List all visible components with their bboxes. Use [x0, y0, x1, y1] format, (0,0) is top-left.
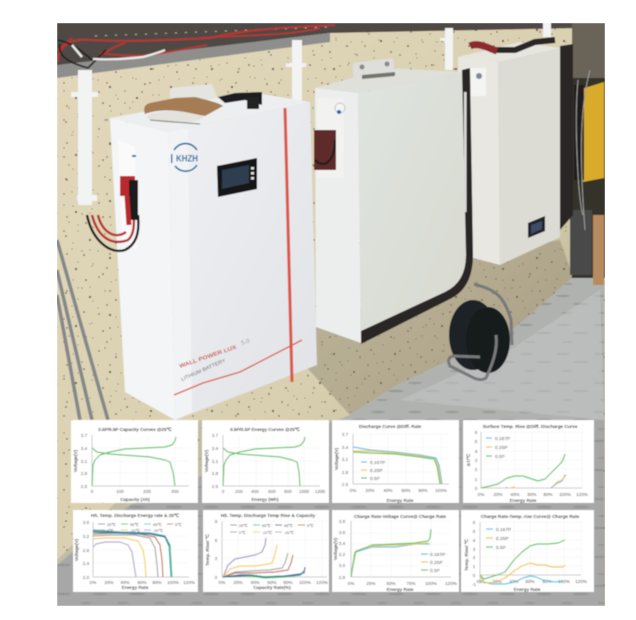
items on top of battery	[144, 92, 262, 124]
chart: charge rate voltage: Energy Rate	[387, 587, 414, 592]
chart: surface temperature rise: 100%	[559, 492, 571, 497]
chart: energy curves: 200	[235, 489, 243, 494]
chart: energy curves: Voltage(V)	[204, 449, 209, 472]
chart: surface temperature rise: 40%	[510, 492, 520, 497]
chart: temperature discharge energy: H/L Temp. Discharge Energy rate & 25℃	[91, 512, 180, 518]
legend: 0.167P	[370, 460, 385, 466]
chart: energy curves: 0.5P/0.5P Energy Curves @25℃	[230, 426, 301, 432]
chart: charge rate temperature rise: 0%	[477, 579, 483, 584]
chart: temperature discharge energy: 2.0	[83, 575, 90, 580]
chart: temperature rise and capacity	[203, 510, 329, 592]
chart: temperature rise and capacity: 6	[215, 538, 218, 543]
display panel	[217, 158, 257, 197]
legend: 45℃	[284, 524, 293, 528]
chart: discharge curve: 40%	[383, 488, 393, 493]
chart: temperature rise and capacity: 100%	[299, 580, 311, 585]
chart: energy curves: 0	[222, 489, 225, 494]
chart: charge rate temperature rise: 80%	[542, 579, 552, 584]
chart: temperature rise and capacity: Capacity Rate(%)	[253, 585, 291, 590]
chart: surface temperature rise: 60%	[527, 492, 537, 497]
chart: capacity curves: 2.5	[81, 484, 88, 489]
chart: temperature discharge energy: 0%	[90, 580, 96, 585]
wiring recess	[118, 140, 137, 250]
chart: temperature discharge energy: 120%	[183, 580, 195, 585]
chart: charge rate temperature rise: Energy Rate	[514, 587, 541, 592]
legend	[421, 552, 445, 574]
cable tray and wires	[57, 23, 580, 78]
red stripes	[285, 108, 292, 382]
chart: charge rate voltage: 3.6	[339, 530, 346, 535]
chart: temperature discharge energy: Energy Rate	[122, 585, 149, 590]
chart: discharge curve: Voltage(V)	[334, 447, 339, 470]
legend: 0.5P	[496, 545, 506, 551]
chart: discharge curve	[332, 420, 459, 503]
chart: charge rate temperature rise: 3	[473, 547, 476, 552]
chart: capacity curves: 3.4	[81, 446, 88, 451]
legend	[486, 527, 511, 551]
floor	[57, 270, 604, 606]
chart: discharge curve: 20%	[365, 488, 375, 493]
grey floor conduits	[57, 240, 108, 420]
chart: capacity curves: 3.7	[81, 433, 88, 438]
logo: KHZH: KHZH	[176, 154, 198, 164]
chart: temperature discharge energy: 20%	[104, 580, 114, 585]
chart: charge rate temperature rise: 5	[473, 529, 476, 534]
chart: capacity curves: 0	[91, 489, 94, 494]
chart: energy curves: 2.5	[212, 484, 219, 489]
chart: temperature discharge energy	[73, 510, 198, 592]
chart: discharge curve: 3.1	[342, 457, 349, 462]
legend: 0.25P	[496, 536, 509, 542]
legend: 0℃	[107, 529, 114, 533]
battery unit 1: LITHIUM BATTERY	[180, 358, 227, 383]
chart: capacity curves	[71, 420, 198, 503]
product label: WALL POWER LUX	[179, 345, 238, 370]
legend: 0.25P	[430, 560, 443, 566]
legend: 5℃	[307, 524, 314, 528]
legend: -10℃	[262, 531, 272, 535]
legend: -20℃	[153, 529, 163, 533]
chart: discharge curve: 3.4	[342, 445, 349, 450]
legend: 0.25P	[370, 468, 383, 474]
legend: 0.167P	[495, 436, 510, 442]
chart: temperature discharge energy: 3.6	[83, 520, 90, 525]
chart: charge rate temperature rise: -1	[472, 582, 476, 587]
legend: 0℃	[239, 531, 246, 535]
battery unit 2	[314, 58, 473, 344]
chart: discharge curve: 80%	[418, 488, 428, 493]
chart: temperature discharge energy: 60%	[137, 580, 147, 585]
legend: 0.167P	[496, 527, 511, 533]
chart: surface temperature rise: 2	[475, 467, 478, 472]
chart: temperature rise and capacity: 60%	[267, 580, 277, 585]
chart: charge rate temperature rise: 6	[473, 520, 476, 525]
legend: 55℃	[130, 523, 139, 527]
legend: 5℃	[175, 523, 182, 527]
chart: capacity curves: 2.8	[81, 471, 88, 476]
chart: charge rate temperature rise: 100%	[558, 579, 570, 584]
chart: energy curves: 600	[268, 489, 276, 494]
chart: capacity curves: 3.1	[81, 459, 88, 464]
chart: temperature discharge energy: 40%	[120, 580, 130, 585]
chart: surface temperature rise: 0%	[478, 492, 484, 497]
chart: charge rate voltage: 3.2	[339, 552, 346, 557]
chart: charge rate temperature rise: 20%	[492, 579, 502, 584]
chart: energy curves: 800	[284, 489, 292, 494]
chart: charge rate temperature rise	[461, 510, 594, 592]
chart: charge rate voltage: 100%	[425, 581, 437, 586]
chart: energy curves	[202, 420, 329, 503]
chart: discharge curve: 60%	[401, 488, 411, 493]
chart: charge rate temperature rise: 120%	[575, 579, 587, 584]
legend: 0.5P	[430, 568, 440, 574]
legend	[361, 460, 385, 482]
chart: energy curves: Energy (Wh)	[251, 497, 279, 502]
chart: temperature discharge energy: 80%	[152, 580, 162, 585]
chart: energy curves: 3.1	[212, 459, 219, 464]
chart: temperature rise and capacity: 3	[215, 556, 218, 561]
chart: charge rate voltage: 120%	[445, 581, 457, 586]
chart: discharge curve: Discharge Curve @Diff. Rate	[359, 424, 422, 429]
chart: temperature discharge energy: 2.8	[83, 548, 90, 553]
chart: temperature rise and capacity: 0%	[219, 580, 225, 585]
legend: -20℃	[284, 531, 294, 535]
chart: surface temperature rise: 80%	[543, 492, 553, 497]
chart: discharge curve: 2.5	[342, 482, 349, 487]
chart: charge rate temperature rise: 4	[473, 538, 476, 543]
chart: surface temperature rise: Surface Temp. Rise @Diff. Discharge Curve	[483, 424, 578, 429]
chart: discharge curve: 100%	[435, 488, 447, 493]
chart: surface temperature rise	[463, 420, 594, 503]
battery unit 3	[458, 40, 573, 265]
chart: charge rate voltage: 50%	[386, 581, 396, 586]
legend: -10℃	[130, 529, 140, 533]
chart: discharge curve: Energy Rate	[387, 498, 414, 503]
chart: surface temperature rise: 3	[475, 458, 478, 463]
legend: 0.5P	[370, 476, 380, 482]
chart: charge rate temperature rise: 60%	[525, 579, 535, 584]
legend: 0.167P	[430, 552, 445, 558]
chart: charge rate voltage: 3.0	[339, 563, 346, 568]
chart: temperature rise and capacity: 9	[215, 519, 218, 524]
chart: charge rate temperature rise: 2	[473, 555, 476, 560]
chart: energy curves: 3.7	[212, 433, 219, 438]
chart: capacity curves: 100	[116, 489, 124, 494]
chart: charge rate temperature rise: 1	[473, 564, 476, 569]
chart: surface temperature rise: 4	[475, 449, 478, 454]
chart: temperature discharge energy: 100%	[167, 580, 179, 585]
chart: energy curves: 3.4	[212, 446, 219, 451]
legend: 25℃	[239, 524, 248, 528]
chart: temperature rise and capacity: 40%	[250, 580, 260, 585]
chart: discharge curve: 3.7	[342, 432, 349, 437]
chart: capacity curves: Capacity (Ah)	[120, 497, 150, 502]
chart: charge rate temperature rise: Charge Rate-Temp. rise Curve@ Charge Rate	[481, 514, 580, 519]
chart: capacity curves: 300	[171, 489, 179, 494]
chart: capacity curves: Voltage(V)	[73, 449, 78, 472]
chart: surface temperature rise: Energy Rate	[510, 498, 537, 503]
chart: temperature rise and capacity: 0	[215, 575, 218, 580]
chart: charge rate voltage: 25%	[366, 581, 376, 586]
chart: charge rate voltage: 3.4	[339, 541, 346, 546]
chart: charge rate voltage	[332, 510, 459, 592]
chart: charge rate temperature rise: 0	[473, 573, 476, 578]
chart: surface temperature rise: 120%	[576, 492, 588, 497]
conduit pipes	[71, 23, 551, 205]
chart: surface temperature rise: 0	[475, 486, 478, 491]
chart: temperature discharge energy: 3.2	[83, 534, 90, 539]
legend	[230, 524, 314, 535]
legend: 55℃	[262, 524, 271, 528]
chart: charge rate voltage: 75%	[406, 581, 416, 586]
chart: temperature rise and capacity: H/L Temp. Discharge Temp Rise & Capacity	[221, 513, 316, 518]
charts	[71, 420, 594, 592]
chart: charge rate voltage: 3.8	[339, 519, 346, 524]
chart: temperature rise and capacity: 120%	[316, 580, 328, 585]
chart: temperature rise and capacity: Temp. Rise/ ℃	[204, 533, 210, 566]
chart: charge rate voltage: Charge Rate-Voltage Curve@ Charge Rate	[354, 514, 446, 519]
right background clutter	[570, 23, 605, 285]
chart: charge rate voltage: Voltage(V)	[333, 537, 338, 560]
chart: surface temperature rise: 6	[475, 430, 478, 435]
chart: discharge curve: 2.8	[342, 470, 349, 475]
chart: surface temperature rise: 1	[475, 477, 478, 482]
chart: surface temperature rise: ΔT/℃	[465, 453, 471, 466]
chart: temperature rise and capacity: 80%	[283, 580, 293, 585]
chart: charge rate temperature rise: Temp. Rise/ ℃	[463, 538, 469, 571]
legend	[98, 523, 182, 533]
cable reel	[449, 284, 512, 380]
bottom dark chart gap shade	[57, 420, 604, 606]
legend: 45℃	[153, 523, 162, 527]
chart: surface temperature rise: 20%	[493, 492, 503, 497]
legend: 0.5P	[495, 454, 505, 460]
battery unit 1	[87, 84, 317, 420]
chart: charge rate temperature rise: 40%	[509, 579, 519, 584]
chart: surface temperature rise: 5	[475, 439, 478, 444]
chart: energy curves: 1000	[299, 489, 310, 494]
chart: temperature rise and capacity: 20%	[233, 580, 243, 585]
chart: temperature discharge energy: 2.4	[83, 561, 90, 566]
legend	[486, 436, 510, 460]
chart: charge rate voltage: 2.8	[339, 575, 346, 580]
chart: energy curves: 2.8	[212, 471, 219, 476]
battery unit 1: 5.0	[241, 338, 251, 347]
chart: discharge curve: 0%	[350, 488, 356, 493]
chart: capacity curves: 200	[143, 489, 151, 494]
legend: 25℃	[107, 523, 116, 527]
chart: energy curves: 400	[251, 489, 259, 494]
chart: energy curves: 1200	[315, 489, 326, 494]
legend: 0.25P	[495, 445, 508, 451]
chart: temperature discharge energy: Voltage(V)	[74, 538, 79, 561]
chart: capacity curves: 0.5P/0.5P Capacity Curves @25℃	[98, 426, 173, 432]
chart: charge rate voltage: 0%	[348, 581, 354, 586]
logo: KHZH	[171, 144, 198, 171]
